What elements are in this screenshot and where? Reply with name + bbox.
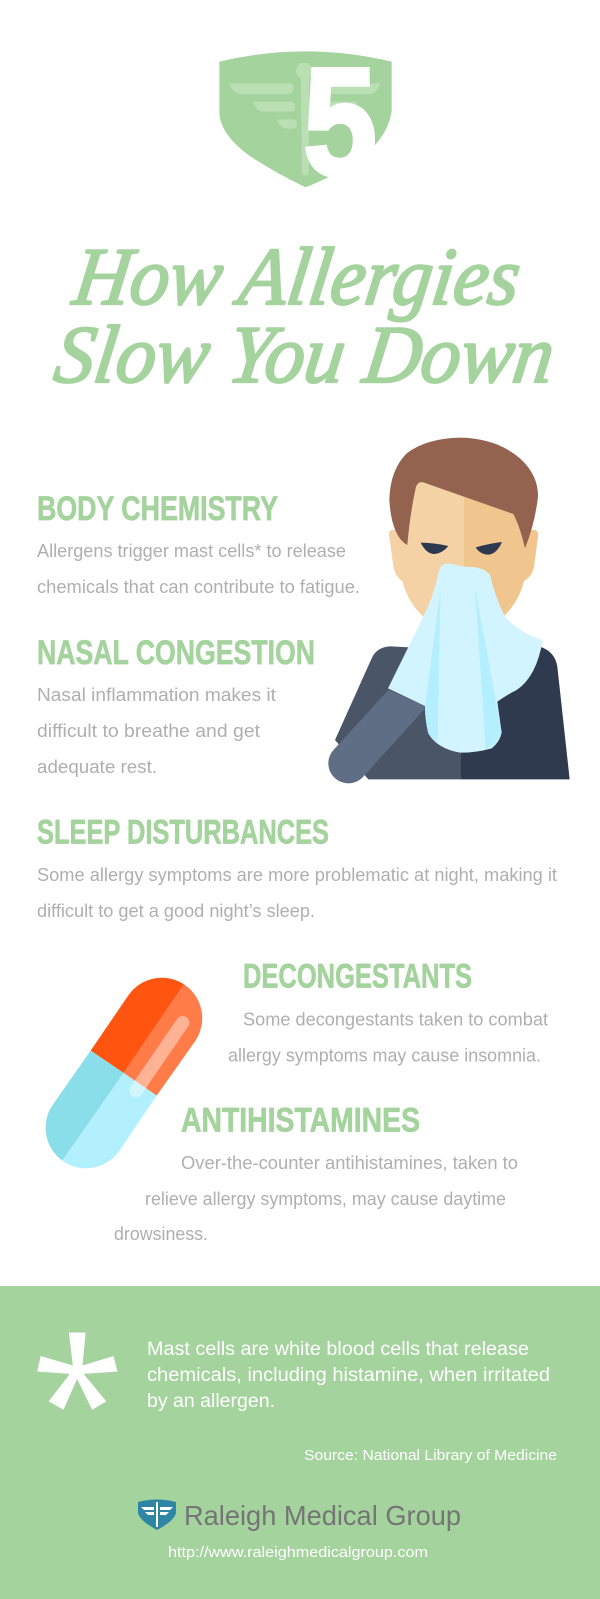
section: nasal congestion: difficult to breathe and get	[37, 720, 260, 741]
section: antihistamines	[114, 1102, 518, 1244]
section: antihistamines: ANTIHISTAMINES	[181, 1102, 420, 1140]
section: body chemistry: BODY CHEMISTRY	[37, 490, 278, 528]
definition text	[147, 1339, 550, 1412]
definition text: chemicals, including histamine, when irritated	[147, 1365, 550, 1386]
website url: http://www.raleighmedicalgroup.com	[168, 1544, 428, 1561]
panel: footer band	[0, 1286, 600, 1599]
definition text: by an allergen.	[147, 1391, 275, 1412]
section: body chemistry: chemicals that can contribute to fatigue.	[37, 576, 360, 597]
section: antihistamines: Over-the-counter antihistamines, taken to	[181, 1152, 518, 1173]
section: decongestants: Some decongestants taken to combat	[243, 1008, 548, 1030]
section: body chemistry: Allergens trigger mast cells* to release	[37, 540, 346, 561]
section: nasal congestion: NASAL CONGESTION	[37, 634, 315, 672]
section: sleep disturbances: difficult to get a good night’s sleep.	[37, 900, 315, 921]
title: How Allergies	[68, 231, 526, 322]
section: decongestants	[228, 958, 548, 1066]
title	[49, 231, 560, 400]
section: nasal congestion: adequate rest.	[37, 756, 157, 777]
title: Slow You Down	[49, 309, 560, 400]
section: nasal congestion	[37, 634, 315, 777]
definition text: Mast cells are white blood cells that release	[147, 1339, 529, 1360]
section: body chemistry	[37, 490, 360, 597]
icon: shield with number 5: 5	[303, 36, 377, 208]
section: antihistamines: relieve allergy symptoms, may cause daytime	[145, 1188, 506, 1209]
source: Source: National Library of Medicine	[304, 1447, 557, 1464]
section: sleep disturbances: SLEEP DISTURBANCES	[37, 814, 329, 852]
illustration: man sneezing into tissue	[328, 438, 570, 783]
section: sleep disturbances	[37, 814, 557, 921]
logo: shield icon	[138, 1500, 176, 1530]
icon: capsule pill	[46, 978, 202, 1168]
icon: shield with number 5	[219, 36, 392, 208]
section: decongestants: DECONGESTANTS	[243, 958, 472, 996]
section: antihistamines: drowsiness.	[114, 1223, 208, 1244]
section: nasal congestion: Nasal inflammation makes it	[37, 684, 276, 705]
section: sleep disturbances: Some allergy symptoms are more problematic at night, making it	[37, 864, 557, 885]
logo: wordmark: Raleigh Medical Group	[184, 1500, 461, 1531]
section: decongestants: allergy symptoms may cause insomnia.	[228, 1044, 541, 1066]
icon: asterisk	[37, 1333, 117, 1410]
